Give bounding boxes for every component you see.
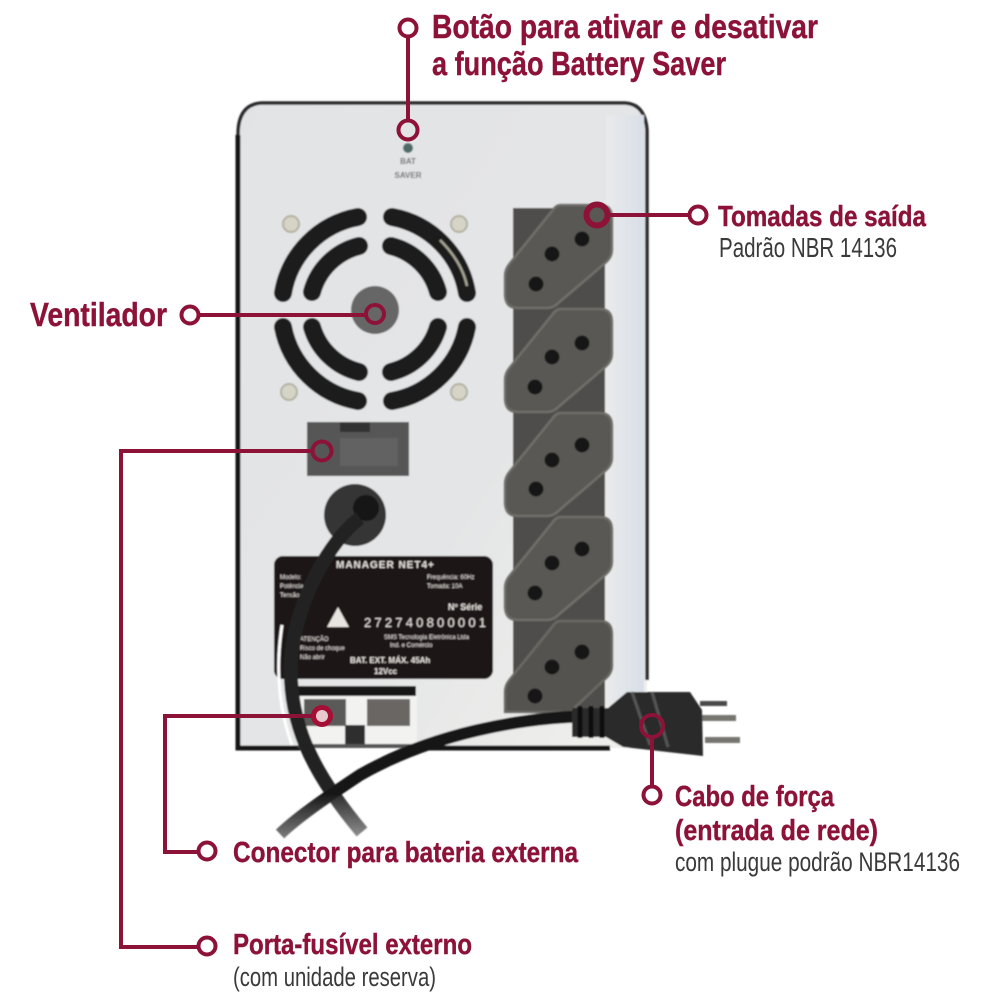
grommet hole <box>353 495 379 521</box>
screws <box>281 216 467 400</box>
subtext: Padrão NBR 14136 <box>719 232 897 263</box>
product: UPS rear panel <box>237 103 740 834</box>
fan grille <box>283 217 467 401</box>
leader line <box>650 737 654 786</box>
outlet strip backing <box>513 208 605 713</box>
rating plate: Tensão: <box>280 593 301 599</box>
cord white highlight <box>279 625 292 745</box>
heading: Cabo de força <box>675 781 835 813</box>
heading: Conector para bateria externa <box>233 837 579 869</box>
rating plate: Risco de choque <box>300 646 345 652</box>
terminal circle <box>198 938 216 954</box>
heading line 2: a função Battery Saver <box>432 45 726 82</box>
case top and right outline <box>238 103 647 680</box>
fan hub <box>351 286 399 334</box>
power plug <box>572 692 740 756</box>
leader line <box>605 213 690 217</box>
rating plate: BAT. EXT. MÁX. 45Ah <box>350 656 430 665</box>
leader line <box>121 451 312 947</box>
heading: Ventilador <box>30 296 167 333</box>
heading: Tomadas de saída <box>718 201 927 233</box>
fan grille glare <box>440 240 467 286</box>
heading line 2: (entrada de rede) <box>675 815 878 847</box>
outlet 4 <box>505 517 612 620</box>
target circle <box>366 305 384 323</box>
case left and bottom outline <box>238 135 610 748</box>
rating plate: Ind. e Comércio <box>390 643 433 649</box>
battery saver text line 2: SAVER <box>395 171 422 180</box>
right panel strip <box>606 115 644 705</box>
power cord grommet <box>324 484 386 546</box>
outlet 2 <box>505 309 612 412</box>
rating plate: Tomada: 10A <box>427 584 462 590</box>
rating plate: MANAGER NET4+ <box>336 560 435 571</box>
target circle <box>312 442 332 460</box>
subtext: (com unidade reserva) <box>233 962 436 992</box>
target circle <box>314 708 330 724</box>
target circle <box>398 120 418 140</box>
rating plate: 272740800001 <box>364 615 486 630</box>
battery saver text: BAT <box>400 157 416 166</box>
callout: power cable <box>641 715 960 877</box>
leader line <box>198 313 366 317</box>
leader line <box>165 716 312 852</box>
terminal circle <box>690 206 706 224</box>
rating plate: SMS Tecnologia Eletrônica Ltda <box>384 635 470 641</box>
power cord to plug <box>280 716 600 834</box>
outlet 3 <box>505 413 612 516</box>
callout: output outlets <box>586 201 927 263</box>
fuse holder <box>307 422 409 476</box>
outlet 5 <box>505 621 612 712</box>
terminal circle <box>182 306 198 324</box>
power cord to unit <box>291 518 362 832</box>
callout: fan <box>30 296 384 333</box>
case body <box>237 103 647 748</box>
callout: external fuse holder <box>121 442 472 992</box>
heading: Botão para ativar e desativar <box>432 8 818 45</box>
terminal circle <box>644 786 660 804</box>
rating plate: Nº Série <box>448 602 482 612</box>
rating plate: Frequência: 60Hz <box>427 575 474 581</box>
rating plate: Modelo: <box>280 575 302 581</box>
rating plate <box>274 556 493 679</box>
outlet 1 <box>505 205 612 308</box>
rating plate: Potência: <box>280 584 305 590</box>
rating plate: Não abrir <box>300 655 325 661</box>
leader line <box>406 37 410 122</box>
battery saver button <box>403 143 413 153</box>
terminal circle <box>198 842 216 860</box>
terminal circle <box>400 20 416 36</box>
external battery connector <box>298 686 417 748</box>
target circle <box>586 204 608 226</box>
heading: Porta-fusível externo <box>233 929 472 961</box>
callout: external battery connector <box>165 708 579 869</box>
rating plate: 12Vcc <box>374 667 398 676</box>
callout: battery saver button <box>398 8 818 140</box>
target circle <box>641 715 663 737</box>
rating plate: ATENÇÃO <box>300 636 329 643</box>
